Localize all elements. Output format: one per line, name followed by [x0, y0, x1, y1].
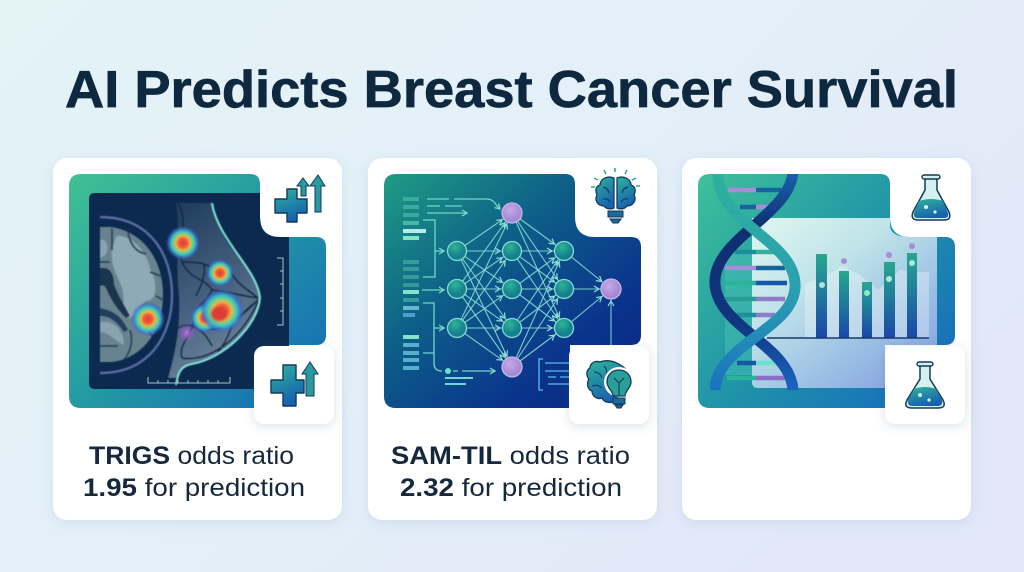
illustration: DNA helix with bar chart: [698, 172, 955, 408]
icon: flask: [912, 175, 950, 220]
chart panel frame: [698, 174, 955, 408]
icon: brain light bulb with rays: [591, 168, 640, 223]
panel: TRIGS: [53, 158, 342, 520]
caption: [391, 442, 630, 502]
card background: [368, 158, 657, 520]
card background: [53, 158, 342, 520]
panel: DNA and chart: [682, 158, 971, 520]
card background: [682, 158, 971, 520]
illustration: breast and brain heatmap scan: [69, 174, 326, 408]
back strand: [715, 172, 793, 390]
icon tile: plus with arrow: [254, 346, 334, 424]
front strand: [715, 172, 795, 390]
bulb base: [613, 398, 625, 408]
caption: SAM-TIL odds ratio: [391, 442, 630, 470]
caption: [83, 442, 305, 502]
scan panel frame: [69, 174, 326, 408]
bulb halo: [604, 367, 634, 397]
teal band behind helix: [725, 250, 753, 375]
breast outline with tissue: [168, 203, 260, 385]
output text block: [539, 359, 570, 390]
network dot: [445, 368, 451, 374]
icon tile: brain and bulb: [569, 346, 649, 424]
helix rungs: [725, 190, 787, 378]
brain folds: [592, 366, 607, 388]
input data bars: [403, 197, 426, 370]
caption: 2.32 for prediction: [400, 474, 622, 502]
DNA helix: [715, 172, 795, 390]
network panel frame: [384, 174, 641, 408]
vertical scale: [277, 258, 283, 325]
panel: SAM-TIL: [368, 158, 657, 520]
caption: 1.95 for prediction: [83, 474, 305, 502]
chart background: [752, 218, 937, 388]
title: AI Predicts Breast Cancer Survival: [65, 61, 958, 119]
brain: [587, 361, 628, 402]
input brackets and flow arrows: [422, 199, 500, 384]
bar chart: [767, 253, 929, 338]
horizontal scale: [148, 377, 230, 383]
illustration: neural network: [384, 174, 641, 408]
icon: plus with two arrows: [275, 175, 325, 222]
bulb: [607, 370, 631, 396]
network connections: [457, 213, 611, 367]
chart data points: [819, 243, 915, 296]
caption: TRIGS odds ratio: [89, 442, 294, 470]
dark scan area: [89, 193, 289, 389]
chart area shape: [805, 266, 929, 338]
icon tile: flask: [885, 346, 965, 424]
brain scan: [100, 217, 172, 373]
bulb filament: [614, 378, 624, 396]
network nodes: [448, 203, 621, 377]
heatmap hot spots: [131, 226, 244, 343]
